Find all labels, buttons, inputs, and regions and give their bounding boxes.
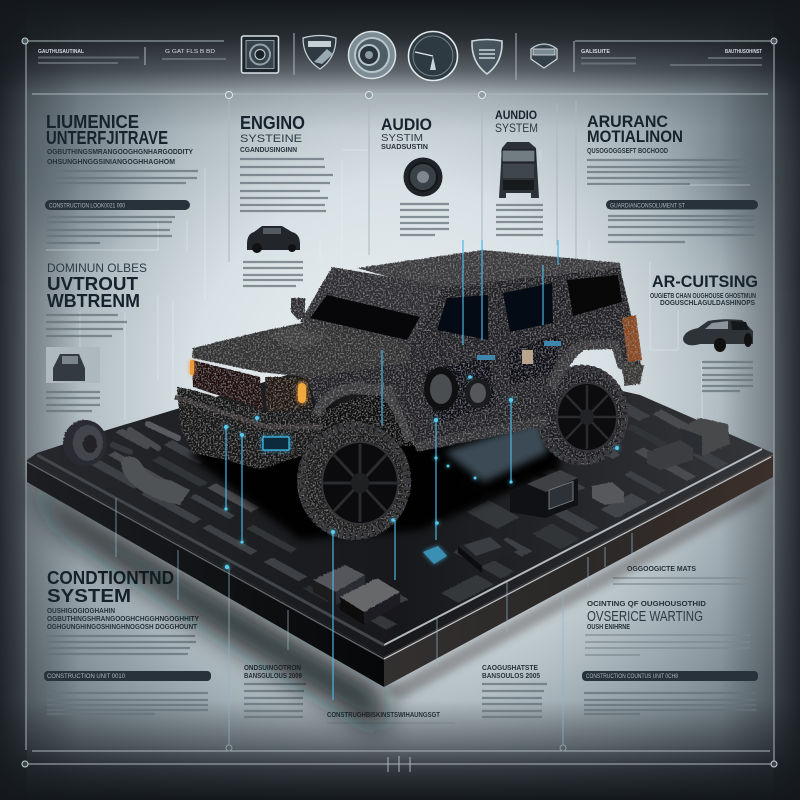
truck: undercarriage xyxy=(193,380,545,470)
panel: conditioned system: OGHGUNGHINGOSHINGHNOGOSH DOGGHOUNT xyxy=(47,624,198,631)
icon: shield badge xyxy=(303,36,336,69)
component: camera box xyxy=(510,470,578,518)
truck: door handles xyxy=(477,341,561,360)
truck: rear wheel xyxy=(536,365,628,465)
panel: audio system truck: SYSTEM xyxy=(495,121,538,135)
panel: conditioned system: OGBUTHINGSHRANGOOGHCHGGHNGOGHHITY xyxy=(47,616,199,623)
top header: left note xyxy=(38,49,226,63)
status bar xyxy=(606,200,758,210)
truck: bumper lip xyxy=(175,397,323,427)
component: rods xyxy=(113,424,178,452)
panel: engine: CGANDUSINGINN xyxy=(240,147,297,154)
panel: overhead notes xyxy=(582,566,758,714)
panel: audio: SYSTIM xyxy=(381,133,423,144)
panel: center caption xyxy=(327,712,455,730)
panel: lumenice: UNTERFJITRAVE xyxy=(46,128,168,148)
truck: side window two xyxy=(503,283,553,332)
truck: headlight left xyxy=(190,360,194,375)
panel: overhead notes: OGGOOGICTE MATS xyxy=(627,566,696,573)
top header: right note: GALISUITE xyxy=(581,49,611,55)
truck: bumper xyxy=(177,387,323,467)
top header: left note: G GAT FLS B BD xyxy=(165,49,215,55)
status bar: GUARDIANCONSOLUMENT ST xyxy=(610,204,685,210)
truck: side window one xyxy=(437,295,488,340)
status bar: CONSTRUCTION LOOK0021 000 xyxy=(49,204,126,210)
panel: lower column left: BANSGULOUS 2009 xyxy=(244,673,302,680)
panel: audio: AUDIO xyxy=(381,115,432,134)
truck: side window three xyxy=(567,275,622,316)
panel: ar-cuitsing: OUGIETB CHAN OUGHOUSE GHOSTMUN xyxy=(650,293,756,300)
truck: side door panel xyxy=(423,355,495,425)
truck: front wheel xyxy=(297,422,411,540)
status bar: CONSTRUCTION COUNTUS UNIT 0CH8 xyxy=(586,674,679,680)
truck: mirror xyxy=(291,298,305,320)
component: comb block xyxy=(647,440,693,470)
truck: speakers xyxy=(424,367,491,411)
platform xyxy=(27,340,773,687)
icon: emblem xyxy=(531,44,557,68)
panel: dominun: DOMINUN OLBES xyxy=(47,261,147,275)
panel: overhead notes: OVSERICE WARTING xyxy=(587,608,703,625)
panel: lower column right xyxy=(482,665,547,717)
panel: lumenice: LIUMENICE xyxy=(46,112,139,132)
truck: rear fender xyxy=(548,340,628,392)
status bar xyxy=(44,671,211,681)
component: gray control box xyxy=(680,418,730,456)
icon: sedan xyxy=(683,319,753,352)
truck: grille xyxy=(192,360,263,410)
panel: overhead notes: OCINTING QF OUGHOUSOTHID xyxy=(587,601,706,608)
icon: car thumbnail xyxy=(46,347,100,383)
component: blue crystal xyxy=(423,546,447,564)
panel: conditioned system: SYSTEM xyxy=(47,586,131,606)
truck xyxy=(175,250,644,540)
truck: rear door panel xyxy=(508,335,560,385)
icon: shield outline xyxy=(472,40,502,74)
truck: body side xyxy=(307,268,642,445)
component: textured block xyxy=(340,578,400,625)
platform components xyxy=(63,274,745,639)
panel: audio system truck: AUNDIO xyxy=(495,108,537,122)
component: gray block xyxy=(313,565,365,605)
panel: ar-cuitsing: AR-CUITSING xyxy=(652,272,758,291)
status bar xyxy=(582,671,758,681)
truck: hood xyxy=(192,322,410,377)
panel: engine: ENGINO xyxy=(240,113,305,133)
panel: arurance xyxy=(587,112,758,242)
shadow under truck xyxy=(188,400,560,540)
status bar xyxy=(45,200,190,210)
panel: lower column right: CAOGUSHATSTE xyxy=(482,665,538,672)
panel: lower column left: ONDSUINGOTRON xyxy=(244,665,301,672)
icon: speaker xyxy=(404,158,442,196)
panel: audio xyxy=(381,115,449,235)
truck: front fender xyxy=(312,382,414,442)
panel: engine: SYSTEINE xyxy=(240,133,302,145)
component: spare tire xyxy=(63,420,107,466)
truck: windshield glass xyxy=(310,295,420,340)
platform shadow xyxy=(27,478,773,735)
icon: round target xyxy=(348,32,396,78)
truck: front quarter xyxy=(265,377,313,413)
panel: audio system truck xyxy=(495,108,543,235)
panel: arurance: QUSOGOGGSEFT BOCHOOD xyxy=(587,148,668,155)
panel: engine xyxy=(240,113,333,286)
icon: square dial xyxy=(242,36,278,73)
panel: ar-cuitsing: DOGUSCHLAGULDASHINOPS xyxy=(660,300,755,307)
panel: lower column right: BANSOULOS 2005 xyxy=(482,673,540,680)
truck: beige screen xyxy=(522,350,533,364)
panel: conditioned system: CONDTIONTND xyxy=(47,568,174,588)
panel: audio: SUADSUSTIN xyxy=(381,144,428,151)
panel: lumenice: OHSUNGHNGGSINIANGOGHHAGHOM xyxy=(47,159,175,166)
panel: center caption: CONSTRUGHBISKINSTSWIHAUNGSGT xyxy=(327,712,441,719)
truck: roof rack xyxy=(357,250,622,292)
panel: dominun xyxy=(46,261,147,411)
top header: right note xyxy=(581,49,762,65)
top header: right note: BAUTHUSOHINST xyxy=(725,49,762,55)
icon: truck xyxy=(496,142,542,198)
panel: lumenice xyxy=(45,112,198,243)
panel: conditioned system xyxy=(44,568,211,714)
panel: arurance: ARURANC xyxy=(587,112,668,131)
panel: lower column left xyxy=(244,665,306,717)
panel: dominun: UVTROUT xyxy=(47,274,138,294)
truck: rear tail light xyxy=(622,315,642,362)
panel: ar-cuitsing xyxy=(650,272,758,391)
panel: arurance: MOTIALINON xyxy=(587,127,683,146)
truck: rear bumper xyxy=(624,362,644,386)
component: laptop module xyxy=(458,534,518,573)
component: gray comb right xyxy=(592,482,624,505)
truck: running board xyxy=(413,415,549,452)
icon: gauge xyxy=(408,32,458,80)
truck: blue display xyxy=(263,437,289,450)
truck: windshield frame xyxy=(300,267,443,345)
status bar: CONSTRUCTION UNIT 0010 xyxy=(47,674,126,680)
component: serpentine casting xyxy=(121,456,190,505)
blue callout lines xyxy=(116,240,632,745)
panel: conditioned system: OUSHIGOGIOGHAHIN xyxy=(47,608,115,615)
panel: lumenice: OGBUTHINGSMRANGOOGHGNHARGODDITY xyxy=(47,149,193,156)
panel: overhead notes: OUSH ENIHRNE xyxy=(587,624,630,631)
truck: hood scoop xyxy=(267,327,330,350)
icon: small car xyxy=(247,226,300,253)
top header: left note: GAUTHUSAUTINAL xyxy=(38,49,84,55)
truck: headlight right xyxy=(298,383,306,403)
panel: dominun: WBTRENM xyxy=(47,291,140,311)
